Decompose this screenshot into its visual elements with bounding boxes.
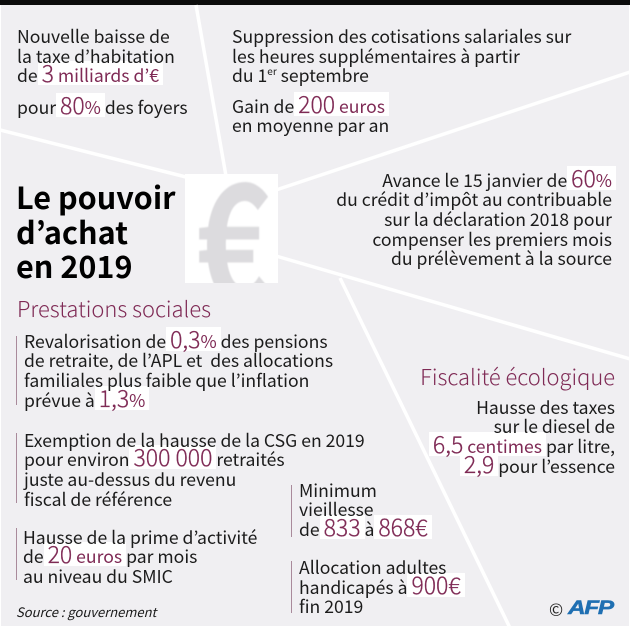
text block: exemption CSG bbox=[23, 428, 365, 512]
text block: prime d'activité bbox=[23, 524, 257, 589]
text block: gain de 200 euros: Gain de bbox=[232, 94, 294, 118]
text block: exemption CSG: fiscal de référence bbox=[24, 487, 172, 512]
text block: crédit d'impôt: Avance le 15 janvier de bbox=[382, 168, 567, 192]
text block: taxes diesel bbox=[429, 394, 615, 480]
text block: taxes diesel: par litre, bbox=[546, 434, 615, 459]
text block: revalorisation: prévue à bbox=[24, 388, 95, 413]
text block: minimum vieillesse: 833 bbox=[324, 509, 361, 543]
text block: prime d'activité: 20 euros bbox=[48, 536, 122, 570]
text block: 80% des foyers: pour des foyers bbox=[17, 94, 188, 120]
text block: cotisations salariales: les heures supplémentaires à partir bbox=[232, 44, 520, 69]
title: en 2019 bbox=[16, 243, 133, 287]
text block: taxes diesel: 6,5 centimes bbox=[433, 426, 542, 460]
text block: taxe d'habitation: de bbox=[17, 63, 38, 88]
text block: taxes diesel: Hausse des taxes bbox=[476, 394, 615, 420]
text block: crédit d'impôt: du crédit d’impôt au contribuable bbox=[336, 187, 612, 212]
text block: minimum vieillesse: Minimum bbox=[299, 478, 377, 502]
text block: taxe d'habitation: 3 milliards d’€ bbox=[42, 55, 159, 89]
text block: crédit d'impôt: compenser les premiers mois bbox=[372, 227, 612, 252]
text block: minimum vieillesse: 868€ bbox=[378, 509, 428, 543]
text block: minimum vieillesse bbox=[299, 478, 432, 543]
divider bar bbox=[291, 485, 292, 537]
text block: crédit d'impôt: du prélèvement à la source bbox=[391, 246, 612, 271]
text block: exemption CSG: pour environ retraités bbox=[24, 447, 285, 472]
text block: allocation adultes handicapés bbox=[299, 555, 465, 619]
text block: gain de 200 euros: en moyenne par an bbox=[232, 113, 389, 138]
text block: gain de 200 euros bbox=[232, 86, 389, 138]
text block: gain de 200 euros: 200 euros bbox=[298, 86, 385, 120]
text block: revalorisation bbox=[24, 320, 333, 414]
logo: copyright AFP: © bbox=[549, 596, 563, 621]
text block: crédit d'impôt: sur la déclaration 2018 pour bbox=[384, 207, 612, 232]
text block: cotisations salariales bbox=[232, 24, 572, 88]
text block: taxes diesel: sur le diesel de bbox=[494, 414, 615, 439]
heading: Prestations sociales: Prestations sociales bbox=[17, 293, 211, 324]
text block: crédit d'impôt bbox=[336, 160, 616, 271]
text block: taxe d'habitation: Nouvelle baisse de bbox=[17, 24, 170, 49]
text block: taxes diesel: 2,9 bbox=[464, 446, 494, 480]
text block: cotisations salariales: du 1er septembre bbox=[232, 63, 369, 88]
text block: revalorisation: 1,3% bbox=[99, 380, 145, 414]
text block: allocation adultes handicapés: handicapés à bbox=[299, 575, 407, 600]
text block: cotisations salariales: Suppression des cotisations salariales sur bbox=[232, 24, 571, 49]
title: d’achat bbox=[16, 209, 128, 253]
text block: allocation adultes handicapés: 900€ bbox=[411, 567, 461, 601]
divider bar bbox=[16, 336, 17, 405]
text block: 80% des foyers: 80% bbox=[60, 86, 101, 120]
text block: taxe d'habitation: la taxe d’habitation bbox=[17, 44, 175, 69]
text block: exemption CSG: 300 000 bbox=[133, 439, 212, 473]
text block: revalorisation: 0,3% bbox=[170, 320, 217, 354]
text block: minimum vieillesse: vieillesse bbox=[299, 497, 374, 522]
divider bar bbox=[291, 561, 292, 613]
text block: taxes diesel: pour l’essence bbox=[498, 454, 615, 479]
text block: revalorisation: de retraite, de l’APL et des allocations bbox=[24, 348, 333, 373]
logo: copyright AFP bbox=[549, 596, 614, 621]
text block: prime d'activité: au niveau du SMIC bbox=[23, 564, 173, 589]
title: Le pouvoir bbox=[16, 174, 175, 218]
text block: revalorisation: Revalorisation de des pensions bbox=[24, 328, 328, 354]
divider bar bbox=[16, 433, 17, 503]
text block: prime d'activité: Hausse de la prime d’activité bbox=[23, 524, 257, 550]
source: Source : gouvernement bbox=[16, 602, 156, 621]
text block: taxe d'habitation bbox=[17, 24, 175, 89]
text block: exemption CSG: Exemption de la hausse de la CSG en 2019 bbox=[24, 428, 365, 452]
text block: prime d'activité: de par mois bbox=[23, 544, 197, 569]
divider bar bbox=[16, 528, 17, 580]
text block: allocation adultes handicapés: fin 2019 bbox=[299, 594, 363, 619]
text block: revalorisation: familiales plus faible que l’inflation bbox=[24, 368, 309, 393]
text block: minimum vieillesse: de à bbox=[299, 517, 374, 542]
text block: allocation adultes handicapés: Allocation adultes bbox=[299, 555, 446, 580]
text block: crédit d'impôt: 60% bbox=[571, 160, 612, 194]
text block: exemption CSG: juste au-dessus du revenu bbox=[24, 467, 236, 492]
title bbox=[16, 174, 176, 287]
heading: Fiscalité écologique: Fiscalité écologique bbox=[420, 361, 615, 392]
logo: copyright AFP: AFP bbox=[568, 598, 613, 619]
